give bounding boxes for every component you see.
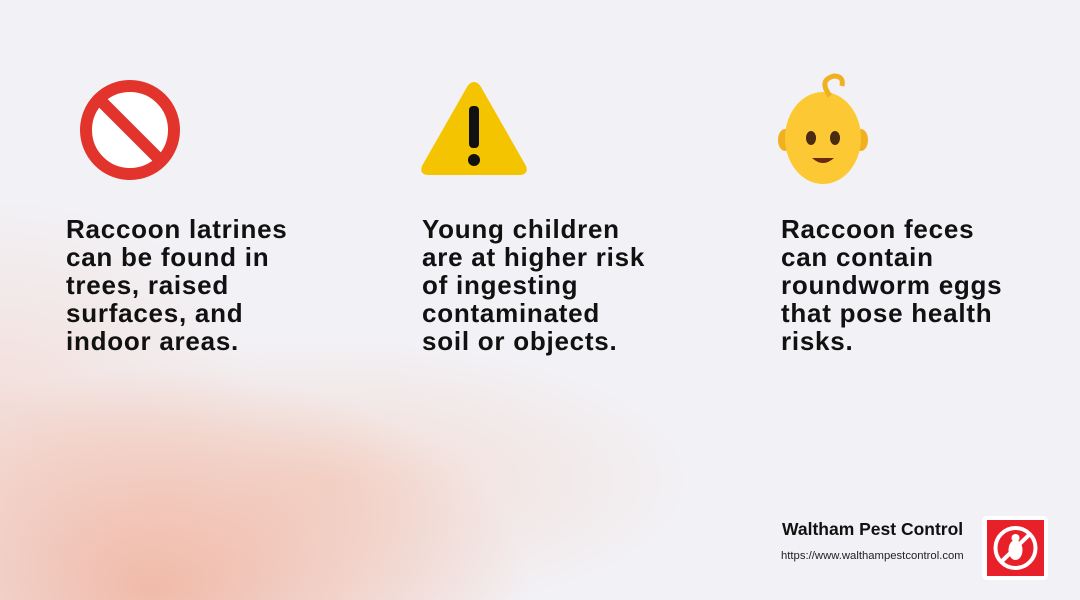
icon: prohibited sign: [80, 80, 180, 180]
text: children: [422, 214, 645, 356]
text: latrines: trees, raised: [66, 270, 229, 300]
icon: baby face: [778, 74, 868, 184]
text: children: are at higher risk: [422, 242, 645, 272]
brand name: Waltham Pest Control: [782, 519, 963, 539]
icon: warning triangle: [421, 82, 527, 175]
text: children: contaminated: [422, 298, 600, 328]
text: latrines: Raccoon latrines: [66, 214, 288, 244]
text: feces: that pose health: [781, 298, 992, 328]
text: feces: Raccoon feces: [781, 214, 974, 244]
text: children: Young children: [422, 214, 620, 244]
text: latrines: can be found in: [66, 242, 269, 272]
text: latrines: indoor areas.: [66, 326, 239, 356]
text: children: soil or objects.: [422, 326, 618, 356]
text: feces: [781, 214, 1002, 356]
text: latrines: [66, 214, 288, 356]
text: children: of ingesting: [422, 270, 578, 300]
logo: [982, 516, 1048, 580]
text: feces: can contain: [781, 242, 934, 272]
brand url: https://www.walthampestcontrol.com: [781, 550, 964, 562]
text: feces: risks.: [781, 326, 853, 356]
text: feces: roundworm eggs: [781, 270, 1002, 300]
text: latrines: surfaces, and: [66, 298, 243, 328]
